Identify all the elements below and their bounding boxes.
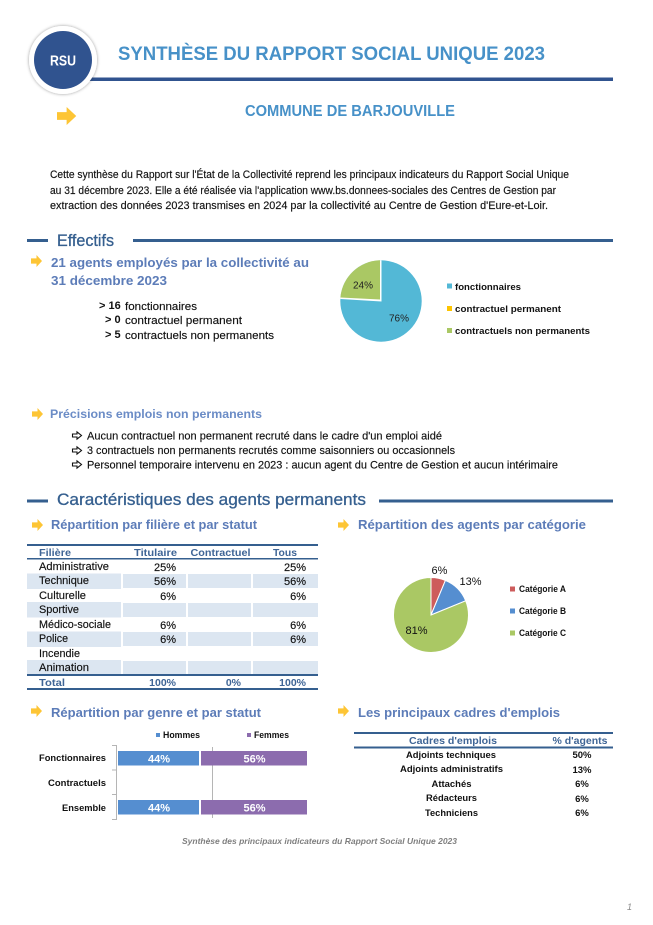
panel: agent counts <box>31 255 309 342</box>
table: filière: Administrative <box>39 561 109 573</box>
legend: catégories: Catégorie B <box>519 606 566 617</box>
heading: catégorie: Répartition des agents par catégorie <box>358 517 586 532</box>
intro text: Cette synthèse du Rapport sur l'État de la Collectivité reprend les principaux indicateurs du Rapport Social Unique <box>50 168 569 181</box>
heading: genre: Répartition par genre et par statut <box>51 705 262 720</box>
list: précisions <box>72 430 558 472</box>
table: filière: Médico-sociale <box>39 619 111 631</box>
legend: genre <box>156 730 289 741</box>
pie chart: statuts: 24% <box>353 280 373 292</box>
legend: statuts: contractuels non permanents <box>455 326 590 337</box>
list: agents by status: > 16 <box>99 300 121 312</box>
table: filière: 6% <box>160 634 176 646</box>
table: filière: 6% <box>160 620 176 632</box>
list: agents by status <box>99 300 275 342</box>
list: agents by status: > 0 <box>105 314 121 326</box>
table: filière <box>27 544 318 690</box>
table: filière: Technique <box>39 575 89 587</box>
table: filière: Animation <box>39 662 89 674</box>
table: filière: Titulaire <box>134 547 177 559</box>
table: cadres d'emplois: Techniciens <box>425 808 478 819</box>
intro text <box>50 168 569 212</box>
bar chart: genre: 44% <box>148 802 170 814</box>
list: agents by status: > 5 <box>105 329 121 341</box>
table: cadres d'emplois: Attachés <box>432 779 472 790</box>
pie chart: catégories <box>393 565 482 652</box>
bar chart: genre: 44% <box>148 754 170 766</box>
list: agents by status: contractuels non permanents <box>125 330 275 342</box>
table: cadres d'emplois: Adjoints administratifs <box>400 764 503 775</box>
legend: statuts: contractuel permanent <box>455 304 562 315</box>
table: filière: 56% <box>154 576 176 588</box>
panel: principaux cadres d'emplois <box>338 705 613 819</box>
table: filière: 6% <box>290 591 306 603</box>
table: filière: Sportive <box>39 604 79 616</box>
title: SYNTHÈSE DU RAPPORT SOCIAL UNIQUE 2023 <box>118 42 545 65</box>
bar chart: genre: Contractuels <box>48 778 106 789</box>
subtitle: commune: COMMUNE DE BARJOUVILLE <box>245 103 455 120</box>
legend: catégories: Catégorie C <box>519 628 566 639</box>
page number: 1 <box>627 902 632 912</box>
table: cadres d'emplois: 13% <box>572 765 592 776</box>
panel: répartition par filière <box>27 517 318 690</box>
heading: number of agents: 21 agents employés par la collectivité au <box>51 255 309 270</box>
table: filière: 6% <box>290 620 306 632</box>
table: cadres d'emplois: Adjoints techniques <box>406 750 496 761</box>
icon: arrow <box>338 705 349 717</box>
table: cadres d'emplois: 6% <box>575 808 589 819</box>
table: cadres d'emplois <box>354 732 613 819</box>
pie chart: statuts <box>340 260 422 342</box>
table: filière: 100% <box>279 677 307 689</box>
list: précisions: Aucun contractuel non permanent recruté dans le cadre d'un emploi aidé <box>87 430 442 442</box>
table: filière: Culturelle <box>39 590 86 602</box>
table: cadres d'emplois: Cadres d'emplois <box>409 735 497 747</box>
list: agents by status: contractuel permanent <box>125 315 242 327</box>
table: filière: Filière <box>39 547 71 559</box>
pie chart: catégories: 13% <box>459 576 482 588</box>
section: Caractéristiques <box>27 491 613 509</box>
icon: arrow <box>32 519 43 531</box>
table: filière: Police <box>39 633 68 645</box>
icon: arrow <box>31 255 42 267</box>
heading: Caractéristiques: Caractéristiques des agents permanents <box>57 491 366 509</box>
legend: genre: Hommes <box>163 730 200 741</box>
table: filière: 25% <box>154 562 176 574</box>
logo: RSU badge <box>29 26 97 94</box>
panel: répartition par genre <box>31 705 307 820</box>
heading: filière: Répartition par filière et par statut <box>51 517 258 532</box>
legend: catégories: Catégorie A <box>519 584 566 595</box>
table: cadres d'emplois: 6% <box>575 779 589 790</box>
icon: arrow <box>32 408 43 420</box>
bar chart: genre: Ensemble <box>62 803 106 814</box>
list: précisions: 3 contractuels non permanents recrutés comme saisonniers ou occasionnels <box>87 445 455 457</box>
bar chart: genre <box>39 746 307 820</box>
panel: répartition par catégorie <box>338 517 586 652</box>
table: filière: 25% <box>284 562 306 574</box>
table: cadres d'emplois: 6% <box>575 794 589 805</box>
icon: yellow arrow <box>57 107 76 125</box>
table: filière: Total <box>39 677 65 689</box>
table: filière: 6% <box>290 634 306 646</box>
heading: précisions: Précisions emplois non permanents <box>50 407 262 421</box>
table: filière: 100% <box>149 677 177 689</box>
table: filière: 56% <box>284 576 306 588</box>
heading: number of agents <box>51 255 309 288</box>
intro text: au 31 décembre 2023. Elle a été réalisée via l'application www.bs.donnees-sociales des Centres de Gestion par <box>50 185 556 197</box>
heading: cadres d'emplois: Les principaux cadres d'emplois <box>358 705 560 720</box>
table: filière: Contractuel <box>190 547 251 559</box>
table: cadres d'emplois: Rédacteurs <box>426 793 477 804</box>
bar chart: genre: 56% <box>243 802 266 814</box>
intro text: extraction des données 2023 transmises en 2024 par la collectivité au Centre de Gestion d'Eure-et-Loir. <box>50 200 548 212</box>
pie chart: statuts: 76% <box>389 314 409 324</box>
table: cadres d'emplois: % d'agents <box>552 735 608 747</box>
bar chart: genre: 56% <box>243 754 266 766</box>
icon: arrow <box>338 519 349 531</box>
legend: genre: Femmes <box>254 730 289 741</box>
panel: précisions emplois non permanents <box>32 407 558 472</box>
footer caption: Synthèse des principaux indicateurs du Rapport Social Unique 2023 <box>182 836 457 846</box>
list: précisions: Personnel temporaire intervenu en 2023 : aucun agent du Centre de Gestion et aucun intérimaire <box>87 460 558 472</box>
icon: arrow <box>31 705 42 717</box>
pie chart: catégories: 6% <box>432 565 448 577</box>
section: Effectifs <box>27 232 613 250</box>
list: agents by status: fonctionnaires <box>125 301 198 313</box>
pie chart: catégories: 81% <box>405 625 428 637</box>
legend: catégories <box>510 584 566 639</box>
table: filière: Tous <box>273 547 297 559</box>
bar chart: genre: Fonctionnaires <box>39 753 106 764</box>
heading: Effectifs: Effectifs <box>57 232 114 250</box>
table: filière: 0% <box>226 677 242 689</box>
legend: statuts: fonctionnaires <box>455 282 521 293</box>
legend: statuts <box>447 282 590 337</box>
table: filière: 6% <box>160 591 176 603</box>
logo: RSU badge: RSU <box>50 54 76 70</box>
table: cadres d'emplois: 50% <box>572 750 592 761</box>
header rule <box>88 78 613 81</box>
heading: number of agents: 31 décembre 2023 <box>51 273 167 288</box>
table: filière: Incendie <box>39 648 80 660</box>
